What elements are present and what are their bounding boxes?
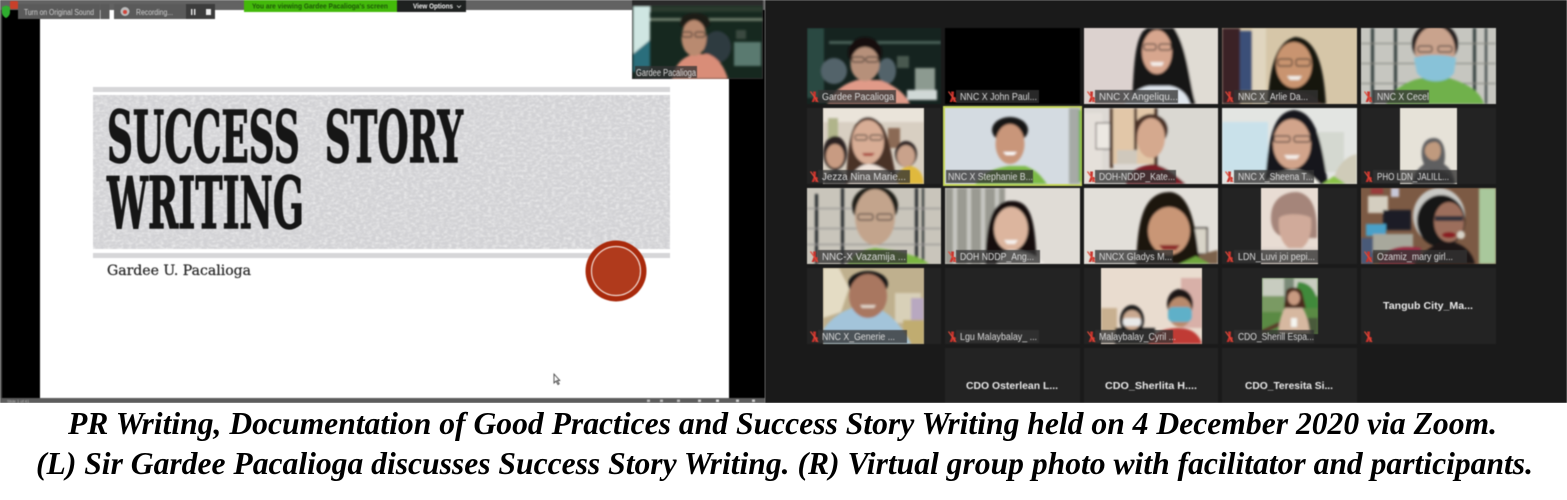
tile: Lgu Malaybalay [946, 269, 1079, 344]
tile: Kate [1083, 107, 1219, 185]
caption [0, 403, 1567, 500]
tile: Gladys: NNCX Gladys M... [1099, 252, 1172, 263]
tile: Generie [808, 267, 940, 345]
tile: CDO Teresita [1223, 349, 1356, 402]
icon: security shield [2, 6, 10, 18]
tile: Angelique [1083, 27, 1219, 105]
viewing banner: You are viewing Gardee Pacalioga's screen [252, 2, 388, 10]
slide page [40, 10, 729, 398]
caption line 1: PR Writing, Documentation of Good Practices and Success Story Writing held on 4 December 2020 via Zoom. [67, 405, 1497, 441]
tile: Malaybalay Cyril: Malaybalay_Cyril ... [1099, 332, 1176, 343]
speaker thumbnail video: Gardee Pacalioga [636, 68, 696, 79]
tile: Kate: DOH-NDDP_Kate... [1099, 172, 1175, 183]
mouse cursor [554, 374, 560, 384]
recording indicator [114, 4, 215, 19]
tile: Jezza Nina Marie [808, 107, 940, 185]
tile: CDO Sherlita [1085, 349, 1217, 402]
tile: Jezza Nina Marie: Jezza Nina Marie... [822, 172, 906, 183]
tile: Vazamija: NNC-X Vazamija ... [822, 252, 906, 263]
caption line 2: (L) Sir Gardee Pacalioga discusses Success Story Writing. (R) Virtual group photo with facilitator and participants. [36, 445, 1533, 481]
viewing banner [244, 0, 466, 12]
tile: Vazamija [806, 187, 942, 265]
tile: Arlie: NNC X_Arlie Da... [1238, 92, 1308, 103]
tile: Ozamiz: Ozamiz_mary girl... [1377, 252, 1453, 263]
tile: Angelique: NNC X Angeliqu... [1099, 92, 1178, 103]
tile: Gardee Pacalioga: Gardee Pacalioga [822, 92, 894, 103]
zoom bottom status bar [0, 398, 765, 404]
zoom bottom status bar: Slide 1 of 41 [7, 398, 30, 404]
slide title band [93, 87, 670, 258]
tile: DOH NDDP Ang [944, 187, 1081, 265]
tile: CDO Sherill: CDO_Sherill Espa... [1238, 332, 1314, 343]
slide title: Success Story Writing: WRITING [106, 161, 304, 245]
original sound button [18, 4, 110, 19]
tile: Sheena [1221, 107, 1358, 185]
slide title: Success Story Writing: SUCCESS STORY [107, 95, 464, 179]
panel: participant gallery [765, 0, 1567, 403]
tile: Generie: NNC X_Generie ... [822, 332, 895, 343]
tile: Cecel: NNC X Cecel [1377, 92, 1429, 103]
recording indicator: Recording... [136, 8, 173, 17]
tile: Tangub City [1362, 269, 1495, 344]
tile: Gardee Pacalioga [806, 28, 942, 105]
slide presenter name: Gardee U. Pacalioga [107, 263, 251, 279]
tile: Sheena: NNC X_Sheena T... [1238, 172, 1313, 183]
tile: CDO Osterlean [946, 349, 1079, 402]
panel: slide share screen [0, 0, 765, 404]
tile: CDO Sherlita: CDO_Sherlita H.... [1105, 380, 1197, 392]
viewing banner: View Options [413, 2, 453, 10]
tile: DOH NDDP Ang: DOH NDDP_Ang... [960, 252, 1034, 263]
tile: Gladys [1083, 187, 1219, 265]
zoom top bar [0, 0, 765, 19]
tile: Stephanie (active speaker): NNC X Stephanie B... [948, 172, 1033, 183]
tile: Arlie [1221, 27, 1358, 105]
notification badge [10, 1, 18, 9]
tile: John Paul: NNC X John Paul... [960, 92, 1037, 103]
tile: Cecel [1360, 27, 1497, 105]
speaker thumbnail video [631, 0, 764, 80]
tile: Malaybalay Cyril [1085, 267, 1217, 345]
tile: Stephanie (active speaker) [942, 105, 1083, 187]
tile: Jalil: PHO LDN_JALILL... [1377, 172, 1449, 183]
tile: Ozamiz [1360, 187, 1497, 265]
tile: Luvi [1223, 187, 1356, 265]
slide title: Success Story Writing [106, 95, 464, 245]
tile: CDO Teresita: CDO_Teresita Si... [1245, 380, 1333, 392]
original sound button: Turn on Original Sound [24, 8, 94, 17]
tile: John Paul [944, 28, 1080, 104]
tile: Tangub City: Tangub City_Ma... [1383, 300, 1473, 312]
tile: Jalil [1362, 107, 1495, 185]
tile: CDO Osterlean: CDO Osterlean L... [966, 380, 1058, 392]
slide red circle ornament [586, 240, 646, 302]
tile: CDO Sherill [1223, 269, 1356, 344]
tile: Luvi: LDN_Luvi joi pepi... [1238, 252, 1315, 263]
tile: Lgu Malaybalay: Lgu Malaybalay_ ... [960, 332, 1037, 343]
